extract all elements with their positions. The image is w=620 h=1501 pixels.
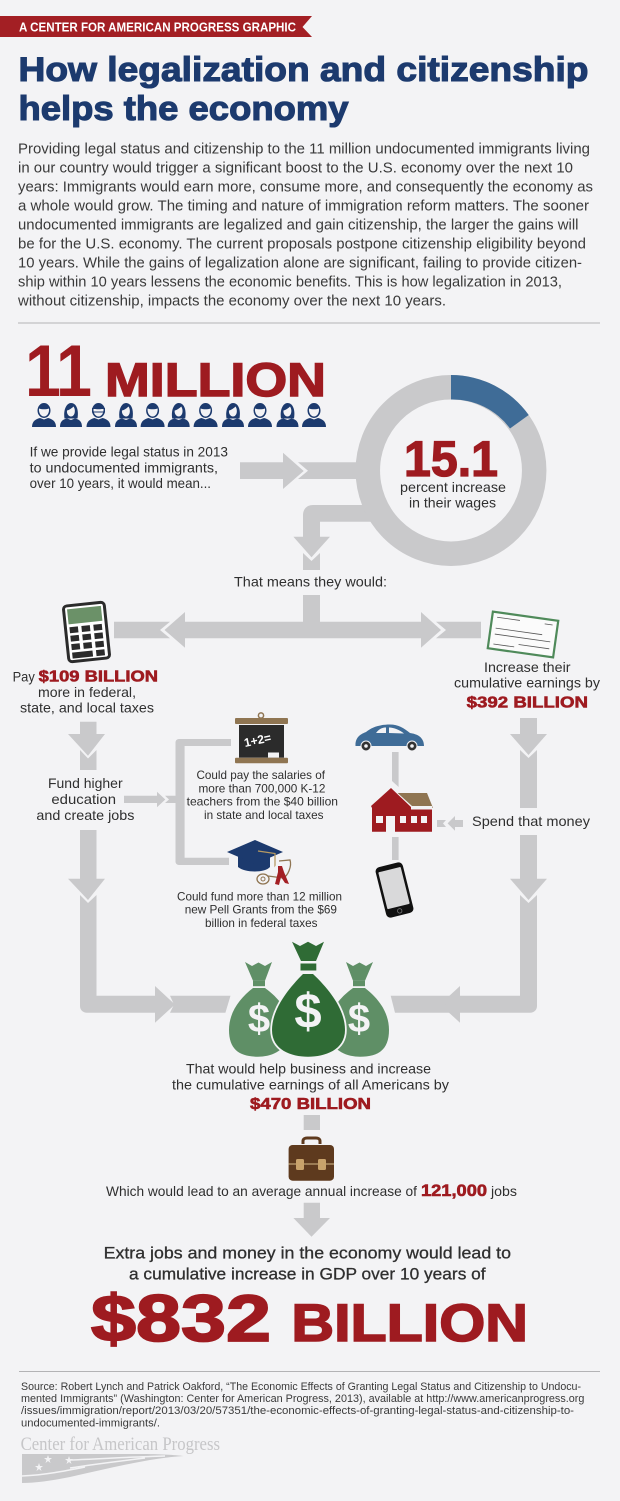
intro text block [17,140,593,310]
bracket: taxes split [176,739,231,865]
intro text block: undocumented immigrants are legalized and gain citizenship, the larger the gains will [18,216,578,234]
arrow: taxes to fund education [68,722,105,770]
text: help business 470 billion: the cumulative earnings of all Americans by [172,1076,449,1092]
source text [21,1381,584,1430]
intro text block: without citizenship, impacts the economy over the next 10 years. [17,292,446,310]
icon: graduation cap and diploma [227,840,291,885]
arrow: status to wages ring [240,453,360,489]
source text: undocumented-immigrants/. [21,1418,160,1430]
text: increase earnings 392 billion [454,659,600,712]
text: help business 470 billion: That would help business and increase [186,1060,431,1076]
text: pay 109 billion in taxes: Pay [13,669,35,685]
icon: money bags: $ [294,985,322,1039]
title: helps the economy [18,90,349,128]
text: that means they would: That means they would: [234,574,387,590]
text: pell grants [177,889,342,930]
heading: 11 million: 1 [56,331,92,412]
logo: center for american progress [21,1434,220,1483]
icon: money bags: $ [248,997,270,1041]
arrow: left column to bags [68,830,230,1023]
icon: calculator [63,602,110,662]
arrow: jobs to gdp [293,1203,330,1237]
intro text block: in our country would trigger a significant boost to the U.S. economy over the next 10 [18,160,573,176]
text: teacher salaries: Could pay the salaries of [196,768,326,782]
source text: /issues/immigration/report/2013/03/20/57351/the-economic-effects-of-granting-legal-status-and-citizenship-to- [21,1405,574,1417]
intro text block: a whole would grow. The timing and nature of immigration reform matters. The sooner [18,198,589,214]
intro text block: ship within 10 years lessens the economic benefits. This is how legalization in 2013, [18,274,562,290]
stat: 15.1 percent increase in wages [400,431,506,511]
text: help business 470 billion [172,1060,449,1113]
text: average annual jobs increase [106,1181,517,1200]
text: extra jobs and money: Extra jobs and money in the economy would lead to [104,1243,511,1262]
connector: car house phone [392,752,399,860]
text: extra jobs and money [104,1243,511,1283]
logo: center for american progress: Center for American Progress [21,1434,220,1455]
source text: mented Immigrants” (Washington: Center for American Progress, 2013), available at http://www.americanprogress.org [21,1393,584,1405]
stat: 832 billion: BILLION [291,1294,528,1353]
text: if we provide legal status [30,444,228,491]
arrow: wages ring down to that means [293,505,374,570]
connector: to briefcase [304,1115,320,1130]
text: pay 109 billion in taxes: more in federal, [38,684,136,700]
stat: 15.1 percent increase in wages: in their wages [409,495,496,511]
text: pay 109 billion in taxes [13,669,158,716]
text: increase earnings 392 billion: cumulative earnings by [454,675,600,691]
icon: chalkboard: 1+2= [243,731,272,750]
text: fund higher education [36,775,134,823]
icons: row of eleven people [32,403,326,427]
intro text block: be for the U.S. economy. The current proposals postpone citizenship eligibility beyond [18,236,586,252]
icon: briefcase [289,1138,334,1181]
text: pell grants: billion in federal taxes [205,916,318,930]
title [18,51,588,128]
text: if we provide legal status: If we provide legal status in 2013 [30,444,228,460]
icon: money bags: $ [348,997,370,1041]
heading: 11 million: MILLION [105,353,326,406]
text: average annual jobs increase: 121,000 [421,1181,487,1200]
text: help business 470 billion: $470 BILLION [250,1096,371,1113]
stat: 832 billion: $832 [91,1281,271,1355]
heading: 11 million: 1 [25,331,61,412]
icon: car [355,724,424,751]
icon: smartphone [375,861,414,919]
text: average annual jobs increase: Which would lead to an average annual increase of [106,1183,417,1199]
icon: house [371,787,433,832]
donut chart: 15.1 percent [368,375,534,554]
text: pell grants: new Pell Grants from the $69 [185,903,337,917]
source text: Source: Robert Lynch and Patrick Oakford, “The Economic Effects of Granting Legal Status and Citizenship to Undocu- [21,1381,581,1393]
text: pay 109 billion in taxes: $109 BILLION [39,669,158,686]
title: How legalization and citizenship [18,51,588,89]
text: teacher salaries: teachers from the $40 billion [187,795,338,809]
text: teacher salaries: in state and local taxes [204,808,324,822]
text: spend that money: Spend that money [472,813,590,829]
text: teacher salaries: more than 700,000 K-12 [198,781,326,795]
text: increase earnings 392 billion: $392 BILLION [467,695,588,712]
text: if we provide legal status: to undocumented immigrants, [30,459,218,475]
text: teacher salaries [187,768,338,822]
stat: 832 billion [91,1281,528,1355]
arrow: right column to bags [391,718,547,1023]
arrow: split left and right [114,595,481,648]
intro text block: 10 years. While the gains of legalization alone are significant, failing to provide citizen- [18,254,582,272]
text: pell grants: Could fund more than 12 million [177,889,342,903]
icon: chalkboard [235,713,288,763]
text: pay 109 billion in taxes: state, and local taxes [20,700,154,716]
arrow: spend to house [437,816,463,831]
icon: money bags [229,942,389,1057]
heading: 11 million [25,331,326,412]
intro text block: years: Immigrants would earn more, consume more, and consequently the economy as [18,178,593,196]
text: fund higher education: and create jobs [36,807,134,823]
banner ribbon: A CENTER FOR AMERICAN PROGRESS GRAPHIC [19,20,296,34]
text: if we provide legal status: over 10 years, it would mean... [30,475,211,491]
arrow: education to bracket [124,792,176,807]
text: fund higher education: education [51,791,116,807]
text: extra jobs and money: a cumulative increase in GDP over 10 years of [129,1264,486,1283]
stat: 15.1 percent increase in wages: percent increase [400,479,506,495]
icon: check [488,612,558,657]
banner ribbon [0,16,312,37]
stat: 15.1 percent increase in wages: 15.1 [404,431,498,487]
text: fund higher education: Fund higher [48,775,123,791]
intro text block: Providing legal status and citizenship to the 11 million undocumented immigrants living [18,140,590,158]
text: average annual jobs increase: jobs [490,1183,517,1199]
text: increase earnings 392 billion: Increase their [484,659,571,675]
